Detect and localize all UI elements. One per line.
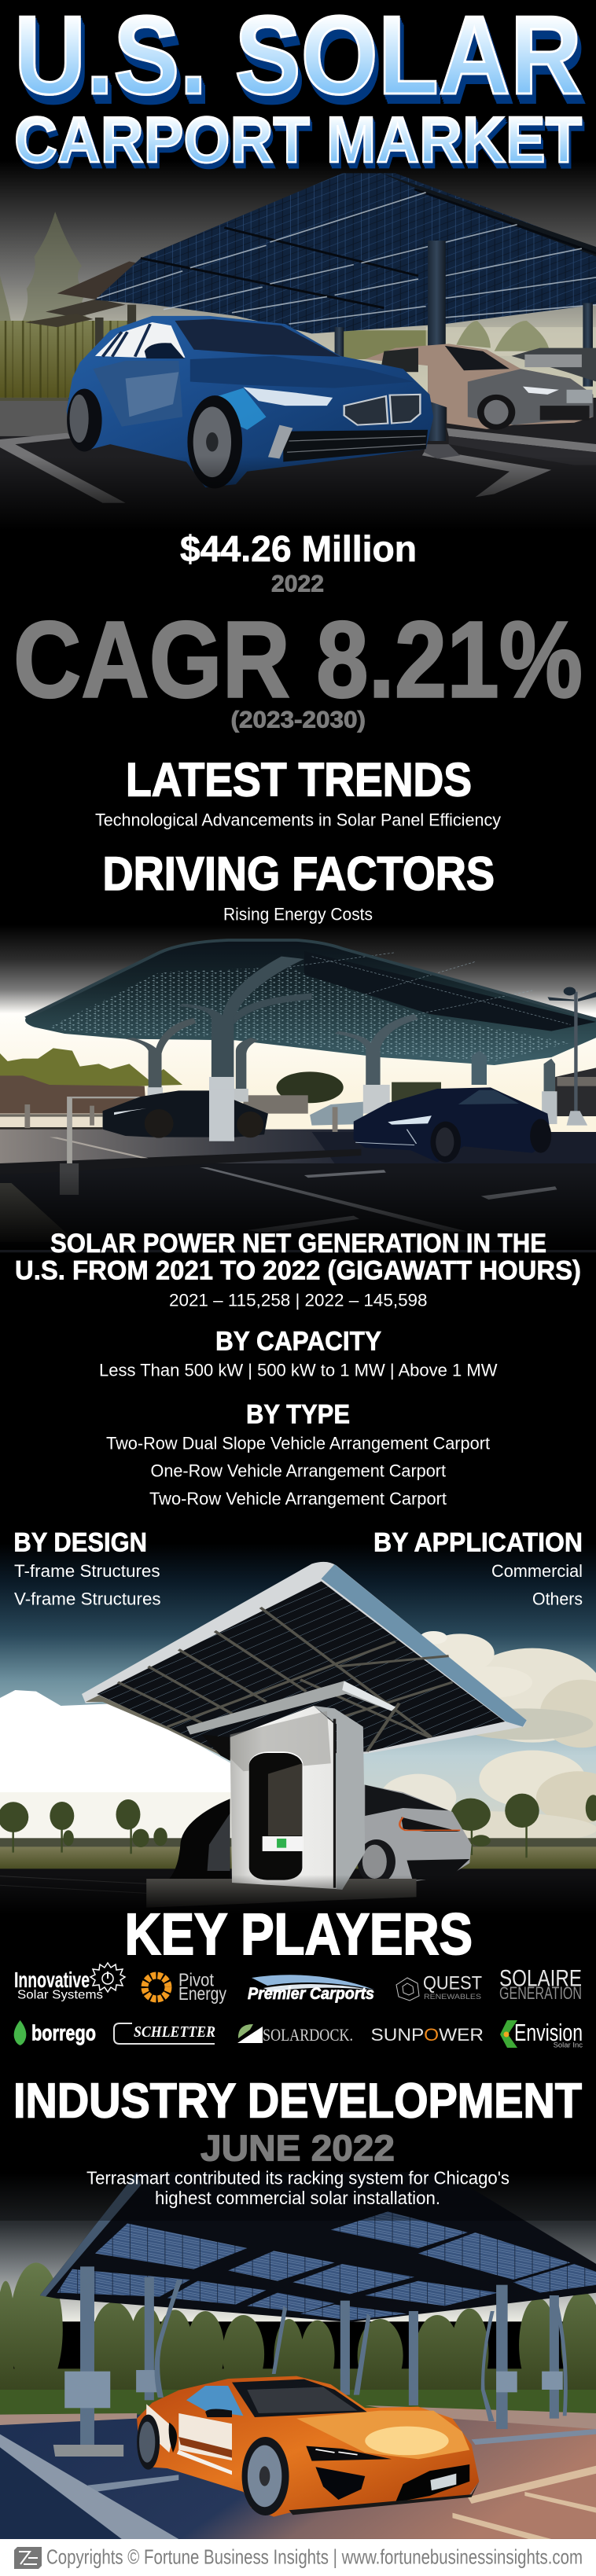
driving factors: DRIVING FACTORS — [102, 847, 495, 900]
image fade — [0, 1875, 596, 1914]
support columns — [53, 2266, 568, 2457]
by type: One-Row Vehicle Arrangement Carport — [151, 1461, 447, 1481]
latest trends — [95, 753, 501, 830]
logo: Innovative Solar Systems: Innovative — [14, 1968, 90, 1992]
driving factors: Rising Energy Costs — [223, 904, 373, 924]
key players heading: KEY PLAYERS — [125, 1902, 473, 1967]
solar power generation stat — [15, 1229, 581, 1310]
logo: Pivot Energy: Energy — [178, 1983, 226, 2004]
left dark car — [103, 1090, 268, 1138]
by design: T-frame Structures — [14, 1561, 160, 1581]
solar power generation stat: 2021 – 115,258 | 2022 – 145,598 — [169, 1290, 428, 1310]
CAGR stat: (2023-2030) — [231, 707, 366, 733]
building — [555, 1068, 596, 1116]
pedestal — [186, 1681, 395, 1890]
solar power generation stat: U.S. FROM 2021 TO 2022 (GIGAWATT HOURS) — [15, 1256, 581, 1286]
logo: Envision Solar — [500, 2019, 583, 2049]
driving factors — [102, 847, 495, 924]
logo: borrego: borrego — [31, 2021, 96, 2045]
wheels — [67, 388, 242, 488]
market size stat — [180, 528, 417, 597]
roof frame — [82, 1562, 527, 1761]
hood highlight — [296, 2411, 469, 2459]
canopy — [40, 2172, 596, 2322]
curb — [0, 2435, 178, 2539]
windshield — [232, 2379, 367, 2417]
image: blue car under solar carport — [0, 160, 596, 529]
charger left arc — [169, 1799, 230, 1879]
by capacity: BY CAPACITY — [215, 1327, 381, 1357]
by application: Others — [532, 1589, 583, 1608]
sports car — [137, 2376, 479, 2517]
by type: Two-Row Vehicle Arrangement Carport — [149, 1489, 447, 1508]
solar power generation stat: SOLAR POWER NET GENERATION IN THE — [50, 1229, 546, 1259]
grey car — [365, 344, 596, 430]
industry development date and text: JUNE 2022 — [201, 2127, 395, 2168]
pavement — [0, 1130, 381, 1166]
by application — [373, 1528, 583, 1608]
columns — [95, 241, 593, 458]
logo: Schletter — [114, 2023, 215, 2044]
logo: SolarDock: SOLARDOCK. — [263, 2025, 353, 2045]
logo: SolarDock — [237, 2024, 353, 2045]
parking curbs — [0, 428, 596, 503]
silver car — [310, 1102, 363, 1126]
latest trends: Technological Advancements in Solar Panel Efficiency — [95, 810, 501, 830]
right dark car — [354, 1087, 551, 1163]
title — [14, 0, 582, 176]
image fade — [0, 456, 596, 530]
logo: Quest Renewables — [396, 1973, 482, 2001]
image: orange sports car under carport — [0, 2172, 596, 2539]
base slab — [146, 1879, 417, 1908]
logo: Premier Carports: Premier Carports — [248, 1985, 374, 2003]
by application: BY APPLICATION — [373, 1528, 583, 1558]
trees — [0, 1794, 596, 1858]
image top shade behind text — [0, 2166, 596, 2221]
logo: Innovative Solar Systems: Solar Systems — [17, 1989, 103, 2002]
solar canopy — [24, 173, 596, 333]
grille — [344, 395, 420, 425]
industry development date and text: Terrasmart contributed its racking system for Chicago's — [86, 2167, 510, 2188]
solar panels — [97, 1582, 505, 1758]
logo: Envision Solar: Solar Inc — [554, 2041, 583, 2049]
market size stat: 2022 — [271, 571, 324, 597]
industry development date and text — [86, 2127, 510, 2208]
intake — [315, 2467, 365, 2500]
ground — [0, 2415, 596, 2539]
grass — [0, 2390, 596, 2416]
image: solar charging canopy — [0, 1543, 596, 1913]
by type — [106, 1400, 491, 1508]
canopy — [25, 940, 596, 1065]
wheels — [137, 2415, 289, 2515]
by capacity: Less Than 500 kW | 500 kW to 1 MW | Above 1 MW — [99, 1361, 498, 1380]
footer — [0, 2539, 596, 2576]
by design: V-frame Structures — [14, 1589, 161, 1608]
latest trends: LATEST TRENDS — [126, 753, 472, 807]
canopy columns — [126, 957, 557, 1141]
trees — [0, 2262, 596, 2398]
by design — [13, 1528, 161, 1608]
distant trees and wall — [0, 1048, 441, 1131]
logo: Quest Renewables: QUEST — [423, 1973, 482, 1994]
lamp post — [547, 987, 596, 1126]
clouds — [0, 1631, 596, 1847]
by type: Two-Row Dual Slope Vehicle Arrangement Carport — [106, 1434, 491, 1453]
tree line and grass — [0, 1838, 596, 1913]
barrier post — [24, 1097, 152, 1195]
logo: Quest Renewables: RENEWABLES — [424, 1993, 481, 2001]
side reflection — [146, 2404, 232, 2460]
blue car — [67, 316, 433, 488]
icon: Fortune Business Insights logo — [14, 2547, 42, 2569]
by capacity — [99, 1327, 498, 1380]
side window — [186, 2386, 244, 2416]
by design: BY DESIGN — [13, 1528, 147, 1558]
market size stat: $44.26 Million — [180, 528, 417, 569]
grey electric car — [358, 1784, 472, 1884]
headlight — [244, 387, 333, 406]
logo: SunPower: SUNP OWER — [371, 2025, 484, 2045]
image: curved solar canopy with dark cars — [0, 925, 596, 1252]
headlights — [306, 2446, 392, 2461]
logo: Solaire Generation — [499, 1966, 582, 2003]
industry development date and text: highest commercial solar installation. — [155, 2188, 440, 2208]
logo: Premier Carports — [248, 1975, 374, 2003]
background trees — [0, 211, 596, 398]
by type: BY TYPE — [246, 1400, 350, 1430]
logo: Pivot Energy — [145, 1970, 226, 2004]
logo: borrego — [14, 2020, 96, 2045]
by application: Commercial — [491, 1561, 583, 1581]
logo: Pivot Energy: Pivot — [178, 1970, 215, 1990]
logo: Schletter: SCHLETTER — [134, 2023, 215, 2041]
image fade — [0, 1171, 596, 1250]
logo: Innovative Solar Systems — [14, 1963, 125, 2002]
